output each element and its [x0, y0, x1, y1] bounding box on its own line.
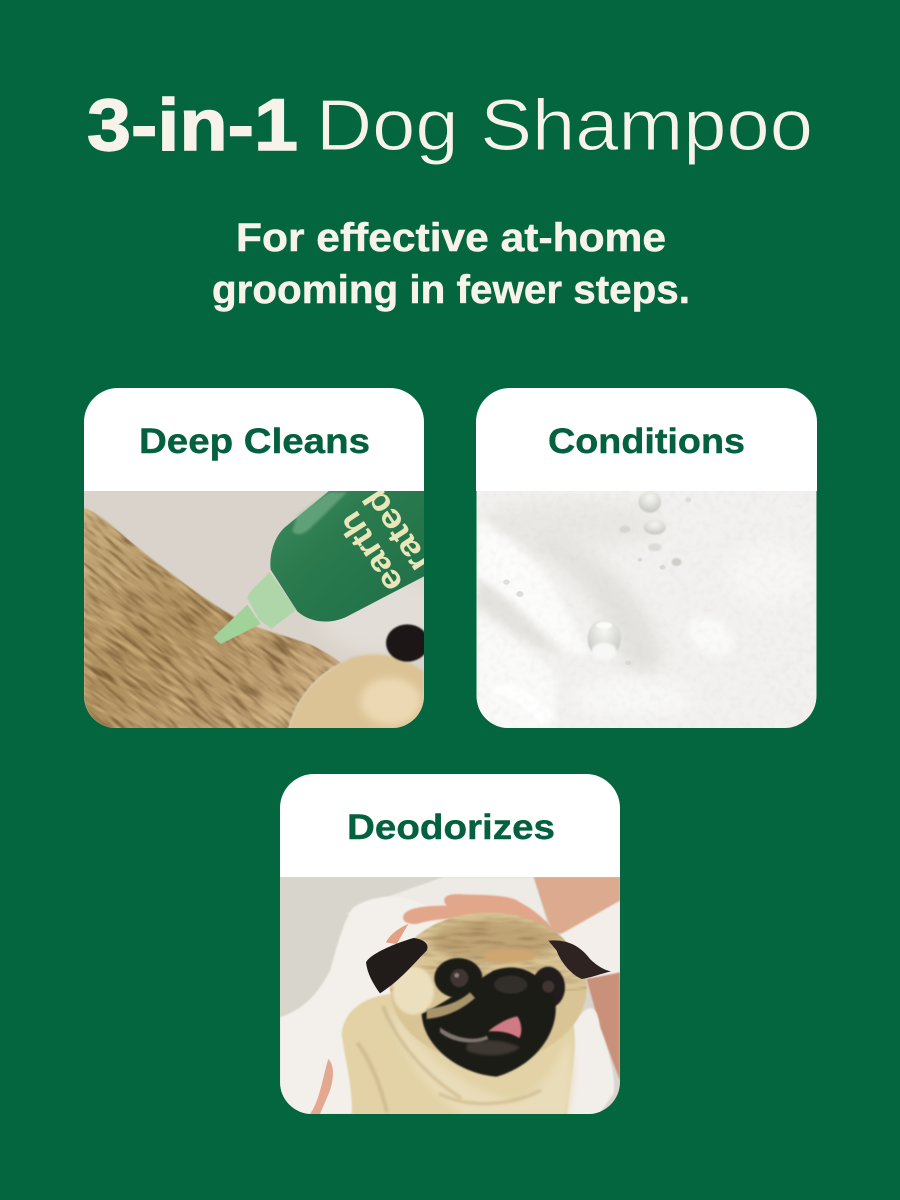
photo: bottle applying shampoo to dog fur: earth — [332, 505, 411, 599]
infographic canvas — [84, 96, 817, 1114]
subtitle: For effective at-home — [236, 216, 666, 260]
panel header: deodorizes: Deodorizes — [347, 808, 555, 847]
panel: conditions — [476, 388, 817, 731]
panel header: conditions: Conditions — [548, 422, 745, 461]
eye patches — [434, 958, 482, 998]
photo: bottle applying shampoo to dog fur — [84, 491, 424, 728]
droplets — [503, 491, 691, 665]
title: Dog Shampoo — [316, 86, 813, 166]
pug head — [390, 912, 587, 1062]
title: 3-in-1 — [87, 85, 298, 166]
panel header: deodorizes — [280, 774, 620, 877]
photo: bottle applying shampoo to dog fur: rated — [356, 482, 437, 579]
muzzle — [422, 967, 556, 1077]
pug body — [342, 994, 575, 1117]
subtitle: grooming in fewer steps. — [212, 268, 690, 312]
hand — [402, 893, 552, 930]
panel: deep cleans — [84, 388, 424, 728]
ears — [366, 938, 428, 993]
title — [87, 85, 813, 166]
eyes and nose — [450, 969, 468, 987]
panel: deodorizes — [280, 774, 647, 1117]
photo: pug wrapped in towel — [280, 877, 620, 1114]
tongue — [488, 1016, 521, 1038]
panel header: deep cleans: Deep Cleans — [139, 422, 370, 461]
panel header: conditions — [476, 388, 817, 491]
panel header: deep cleans — [84, 388, 424, 491]
photo: white foam with water droplets — [476, 491, 816, 728]
subtitle — [212, 216, 690, 312]
